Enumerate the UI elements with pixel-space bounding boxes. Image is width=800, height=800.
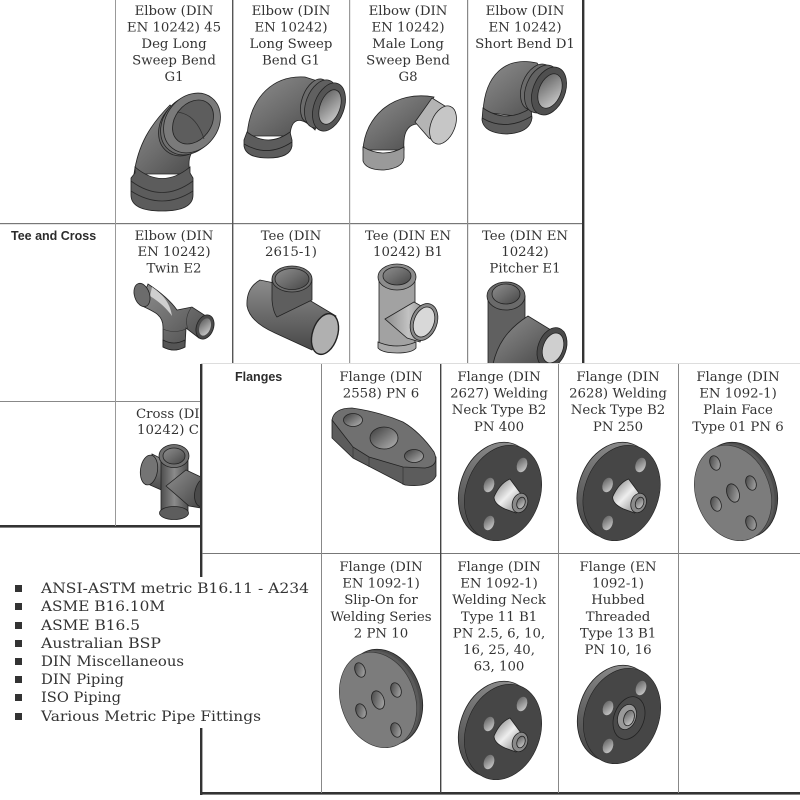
caption: Flange (DIN [576,370,660,385]
cell: flange hubbed threaded [564,560,674,775]
icon: twin elbow [131,281,217,350]
caption: EN 10242) [371,20,445,36]
caption: PN 2.5, 6, 10, [453,626,545,641]
icon: tee [247,266,343,358]
icon: male elbow [363,96,462,170]
caption: 1092-1) [592,577,644,592]
icon: long sweep elbow [244,75,352,158]
cell: flange slip-on [326,560,436,759]
caption: Type 13 B1 [580,626,656,641]
caption: 2 PN 10 [354,626,408,641]
cell: flange DIN 2628 welding neck [564,370,673,552]
cell: tee DIN EN 10242 B1 [365,229,451,353]
icon: oval flange [332,408,436,486]
caption: EN 1092-1) [460,577,538,592]
caption: Elbow (DIN [486,4,565,19]
caption: Flange (DIN [339,370,423,385]
cell: flange DIN 2627 welding neck [445,370,555,552]
caption: Flange (EN [579,560,657,575]
caption: Sweep Bend [132,54,216,68]
text block: standards list: ANSI-ASTM metric B16.11 - A234 [40,581,309,597]
caption: Threaded [586,610,651,625]
caption: Pitcher E1 [489,261,561,276]
text block: standards list: ASME B16.10M [40,599,165,615]
caption: Flange (DIN [457,370,541,385]
icon: welding neck flange [564,431,673,552]
caption: Twin E2 [146,261,202,276]
caption: Elbow (DIN [252,4,331,19]
caption: 16, 25, 40, [463,643,535,658]
caption: Bend G1 [262,54,320,68]
icon: tee B1 [378,264,443,353]
caption: 2615-1) [265,245,317,260]
caption: Elbow (DIN [135,4,214,19]
row heading: flanges: Flanges [235,370,282,384]
text block: standards list: DIN Miscellaneous [41,654,184,670]
text block: standards list: DIN Piping [41,672,124,688]
caption: Tee (DIN EN [365,229,451,244]
caption: Type 01 PN 6 [692,420,784,435]
caption: G8 [398,70,418,85]
caption: 63, 100 [474,660,524,675]
text block: standards list [0,577,309,728]
caption: Sweep Bend [366,54,450,68]
caption: Flange (DIN [696,370,780,385]
caption: Type 11 B1 [461,610,537,625]
cell: flange plain face type 01 [681,370,791,552]
caption: 10242) B1 [373,245,443,260]
caption: Long Sweep [250,37,332,52]
caption: 10242) C1 [137,423,207,438]
cell: elbow short bend D1 [475,4,575,134]
caption: Elbow (DIN [369,4,448,19]
icon: plain face flange [681,431,791,552]
caption: PN 400 [474,420,524,435]
caption: Neck Type B2 [452,403,546,418]
caption: Slip-On for [344,593,418,608]
text block: standards list: ASME B16.5 [40,618,140,634]
panel: upper fittings table [0,0,584,528]
caption: Flange (DIN [339,560,423,575]
caption: Neck Type B2 [571,403,665,418]
icon: short bend elbow [482,59,573,134]
caption: Tee (DIN [261,229,322,244]
caption: Deg Long [141,37,207,52]
caption: EN 10242) 45 [127,20,221,36]
cell: cross DIN EN 10242 [136,407,237,520]
cell: elbow twin E2 [131,229,217,350]
caption: Short Bend D1 [475,37,575,52]
cell: tee pitcher E1 [482,229,572,373]
caption: PN 250 [593,420,643,435]
cell: elbow male long sweep bend G8 [363,4,462,170]
caption: 10242) [501,245,549,260]
caption: Plain Face [703,403,773,418]
caption: Elbow (DIN [135,229,214,244]
icon: 45 degree elbow [131,82,232,211]
caption: 2627) Welding [450,387,548,402]
caption: Cross (DIN EN [136,407,237,422]
caption: Flange (DIN [457,560,541,575]
icon: slip-on flange [326,638,436,759]
caption: EN 10242) [488,20,562,36]
caption: 2628) Welding [569,387,667,402]
icon: welding neck flange [445,670,555,791]
caption: Welding Series [330,610,432,625]
text block: standards list: ISO Piping [41,690,121,706]
icon: hubbed threaded flange [564,654,674,775]
cell: flange welding neck type 11 [445,560,555,791]
caption: Male Long [372,37,444,52]
caption: G1 [164,70,184,85]
cell: flange DIN 2558 PN 6 [332,370,436,486]
icon: pitcher tee [487,282,572,373]
text block: standards list: Various Metric Pipe Fittings [40,709,261,725]
caption: EN 1092-1) [342,577,420,592]
row heading: tee and cross: Tee and Cross [11,229,96,243]
caption: 2558) PN 6 [343,387,419,402]
cell: elbow long sweep bend G1 [244,4,352,158]
caption: EN 10242) [254,20,328,36]
caption: EN 1092-1) [699,387,777,402]
icon: cross fitting [138,444,217,520]
caption: PN 10, 16 [584,643,652,658]
cell: tee DIN 2615-1 [247,229,343,358]
icon: welding neck flange [445,431,555,552]
caption: Welding Neck [452,593,547,608]
cell: elbow 45 degree long sweep bend G1 [127,4,232,211]
caption: EN 10242) [137,245,211,260]
caption: Hubbed [591,593,645,608]
panel: lower flanges table [200,363,800,795]
caption: Tee (DIN EN [482,229,568,244]
text block: standards list: Australian BSP [40,636,161,652]
